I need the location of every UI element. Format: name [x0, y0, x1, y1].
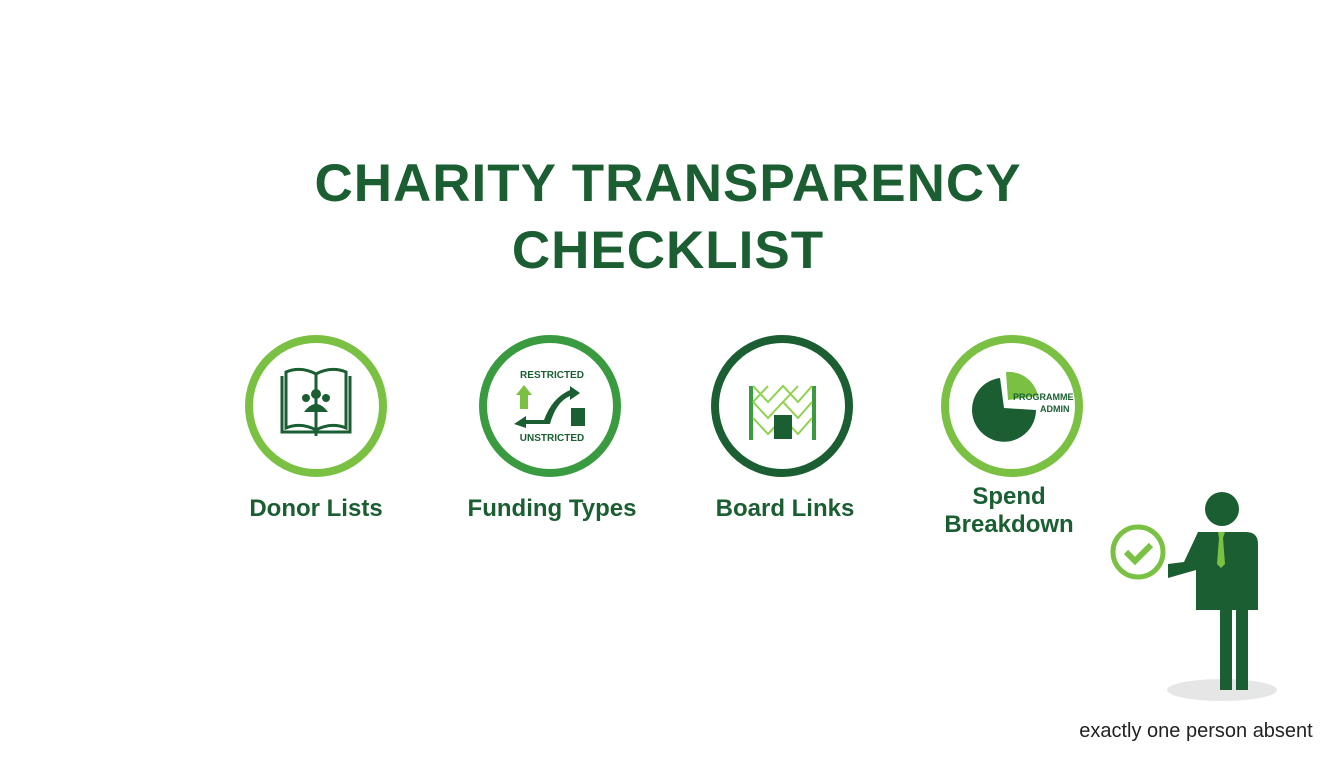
label: spend breakdown — [944, 483, 1074, 538]
icon: funding types — [483, 339, 617, 473]
label: spend breakdown: Breakdown — [944, 511, 1074, 538]
title: CHARITY TRANSPARENCY — [314, 154, 1022, 213]
icon: funding types: UNSTRICTED — [520, 433, 584, 444]
label: donor lists: Donor Lists — [249, 495, 383, 522]
icon: spend breakdown: ADMIN — [1040, 404, 1070, 414]
title — [314, 154, 1022, 280]
icon: funding types: RESTRICTED — [520, 370, 584, 381]
icon: donor lists — [249, 339, 383, 473]
caption: exactly one person absent — [1079, 720, 1313, 742]
icon: spend breakdown — [945, 339, 1079, 473]
person with check — [1113, 492, 1277, 701]
icon: spend breakdown: PROGRAMME — [1013, 392, 1074, 402]
title: CHECKLIST — [512, 221, 824, 280]
icon: board links — [715, 339, 849, 473]
label: board links: Board Links — [716, 495, 854, 522]
label: spend breakdown: Spend — [972, 483, 1046, 510]
label: funding types: Funding Types — [468, 495, 636, 522]
